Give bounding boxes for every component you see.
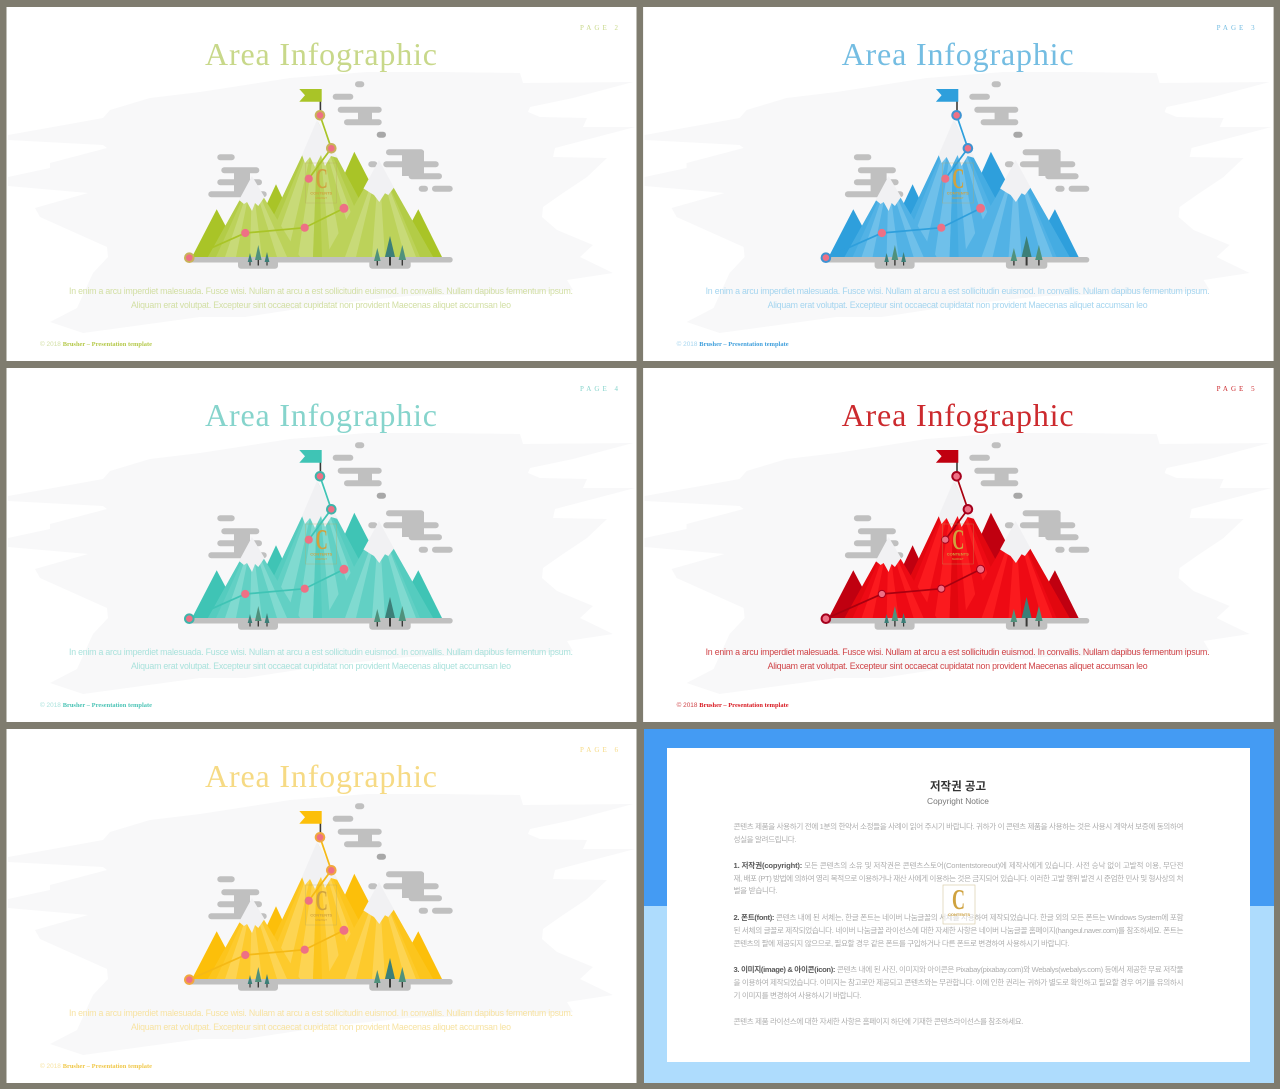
copyright heading: 저작권 공고: [930, 779, 986, 793]
copyright subheading: Copyright Notice: [927, 796, 989, 806]
body text: In enim a arcu imperdiet malesuada. Fusce wisi. Nullam at arcu a est sollicitudin euismod. In convallis. Nullam dapibus fermentum ipsum.: [69, 1008, 573, 1018]
section 1: copyright: 1. 저작권(copyright): 모든 콘텐츠의 소유 및 저작권은 콘텐츠스토어(Contentstoreout)에 제작사에게 있습니다. 사전 승낙 없이 고발적 이용, 무단전: [734, 860, 1184, 870]
closing note: 콘텐츠 제품 라이선스에 대한 자세한 사항은 홈페이지 하단에 기재한 콘텐츠라이선스를 참조하세요.: [734, 1016, 1024, 1026]
body text: [69, 286, 573, 310]
watermark logo: [306, 885, 337, 925]
summit flag: [936, 450, 958, 472]
section 1: copyright: [734, 860, 1184, 895]
clouds: [845, 442, 1089, 558]
ground: [827, 618, 1089, 630]
ground: [827, 257, 1089, 269]
copyright intro: [734, 821, 1184, 844]
snow caps: [876, 120, 1031, 211]
summit flag: [936, 89, 958, 111]
body text: Aliquam erat volutpat. Excepteur sint occaecat cupidatat non provident Maecenas aliquet accumsan leo: [768, 661, 1148, 671]
body text: In enim a arcu imperdiet malesuada. Fusce wisi. Nullam at arcu a est sollicitudin euismod. In convallis. Nullam dapibus fermentum ipsum.: [69, 647, 573, 657]
mountains: [192, 844, 442, 979]
copyright intro: 콘텐츠 제품을 사용하기 전에 1분의 한약서 소정들을 사례이 읽어 주시기 바랍니다. 귀하가 이 콘텐츠 제품을 사용하는 것은 사용시 계약서 보증에 동의하여: [734, 821, 1184, 831]
body text: In enim a arcu imperdiet malesuada. Fusce wisi. Nullam at arcu a est sollicitudin euismod. In convallis. Nullam dapibus fermentum ipsum.: [706, 286, 1210, 296]
snow caps: [876, 481, 1031, 572]
route nodes: [822, 472, 985, 623]
section 2: font: 된 서체의 글꼴로 제작되었습니다. 네이버 나눔글꼴 라이선스에 대한 자세한 사항은 네이버 나눔글꼴 홈페이지(hangeul.naver.com)를 참조하세요. 폰트는: [734, 925, 1184, 935]
climbing route: [189, 837, 344, 980]
footer: © 2018 Brusher – Presentation template: [40, 1062, 152, 1070]
clouds: [208, 442, 453, 558]
summit flag: [299, 811, 322, 833]
snow caps: [239, 842, 394, 933]
body text: In enim a arcu imperdiet malesuada. Fusce wisi. Nullam at arcu a est sollicitudin euismod. In convallis. Nullam dapibus fermentum ipsum.: [706, 647, 1210, 657]
ground: [190, 618, 453, 630]
ground: [190, 257, 453, 269]
footer: © 2018 Brusher – Presentation template: [677, 701, 789, 709]
section 3: image and icon: 기 이미지를 변경하여 사용하시기 바랍니다.: [734, 990, 862, 1000]
title: Area Infographic: [205, 36, 437, 72]
route nodes: [822, 111, 985, 262]
body text: In enim a arcu imperdiet malesuada. Fusce wisi. Nullam at arcu a est sollicitudin euismod. In convallis. Nullam dapibus fermentum ipsum.: [69, 286, 573, 296]
section 3: image and icon: [734, 964, 1184, 1000]
title: Area Infographic: [842, 397, 1074, 433]
clouds: [208, 81, 453, 197]
climbing route: [189, 115, 344, 258]
body text: Aliquam erat volutpat. Excepteur sint occaecat cupidatat non provident Maecenas aliquet accumsan leo: [131, 661, 511, 671]
route nodes: [185, 472, 348, 623]
body text: Aliquam erat volutpat. Excepteur sint occaecat cupidatat non provident Maecenas aliquet accumsan leo: [131, 1022, 511, 1032]
body text: Aliquam erat volutpat. Excepteur sint occaecat cupidatat non provident Maecenas aliquet accumsan leo: [131, 300, 511, 310]
section 1: copyright: 재, 배포 (PT) 방법에 의하여 영리 목적으로 이용하거나 재산 사에게 이용하는 것은 금지되어 있습니다. 이러한 고발 행위 발견 시 준엄한 민사 및 형사상의 처: [734, 873, 1184, 883]
snow caps: [239, 120, 394, 211]
trees: [884, 597, 1043, 626]
section 2: font: [734, 912, 1184, 948]
page number: PAGE 3: [1217, 24, 1255, 32]
route nodes: [185, 111, 348, 262]
mountains: [829, 483, 1079, 618]
panel: green slide, page 2: [6, 7, 636, 361]
title: Area Infographic: [205, 397, 437, 433]
ground: [190, 979, 453, 991]
panel: teal slide, page 4: [6, 368, 636, 722]
watermark logo: CONTENTS: [948, 912, 970, 917]
clouds: [845, 81, 1089, 197]
body text: [69, 1008, 573, 1032]
section 2: font: 2. 폰트(font): 콘텐츠 내에 된 서체는, 한글 폰트는 네이버 나눔글꼴의 서체를 사용하여 제작되었습니다. 한글 외의 모든 폰트는 Windows System에 포함: [734, 912, 1184, 922]
title: Area Infographic: [205, 758, 437, 794]
panel: blue slide, page 3: [643, 7, 1274, 361]
mountains: [192, 122, 442, 257]
section 2: font: 콘텐츠의 팔에 제공되지 않으므로, 필요할 경우 같은 폰트를 구입하거나 다른 폰트로 변경하여 사용하시기 바랍니다.: [734, 938, 1070, 948]
body text: [706, 647, 1210, 671]
climbing route: [189, 476, 344, 619]
trees: [248, 236, 406, 266]
snow caps: [239, 481, 394, 572]
route nodes: [185, 833, 348, 984]
climbing route: [826, 476, 981, 619]
page number: PAGE 5: [1217, 385, 1255, 393]
section 3: image and icon: 3. 이미지(image) & 아이콘(icon): 콘텐츠 내에 된 사진, 이미지와 아이콘은 Pixabay(pixabay.com)와 Webalys(webalys.com) 등에서 제공한 무료 저작물: [734, 964, 1184, 974]
footer: © 2018 Brusher – Presentation template: [40, 340, 152, 348]
section 1: copyright: 벌을 받습니다.: [734, 885, 778, 895]
copyright intro: 성실을 알려드립니다.: [734, 834, 796, 844]
section 3: image and icon: 을 이용하여 제작되었습니다. 이미지는 참고로만 제공되고 콘텐츠와는 무관합니다. 이에 인한 권리는 귀하가 별도로 확인하고 필요할 경우 여기를 유의하시: [734, 977, 1184, 987]
watermark logo: [306, 524, 337, 564]
watermark logo: [942, 524, 973, 564]
watermark logo: [942, 163, 973, 203]
trees: [884, 236, 1043, 266]
title: Area Infographic: [842, 36, 1074, 72]
page number: PAGE 6: [580, 746, 618, 754]
panel: red slide, page 5: [643, 368, 1274, 722]
trees: [248, 597, 406, 626]
climbing route: [826, 115, 981, 258]
summit flag: [299, 89, 322, 111]
body text: Aliquam erat volutpat. Excepteur sint occaecat cupidatat non provident Maecenas aliquet accumsan leo: [768, 300, 1148, 310]
footer: © 2018 Brusher – Presentation template: [40, 701, 152, 709]
watermark logo: [306, 163, 337, 203]
watermark logo: [943, 885, 975, 924]
page number: PAGE 4: [580, 385, 618, 393]
mountains: [192, 483, 442, 618]
body text: [69, 647, 573, 671]
panel: copyright notice: [644, 729, 1274, 1083]
watermark logo: C: [952, 885, 965, 916]
panel: yellow slide, page 6: [6, 729, 636, 1083]
trees: [248, 958, 406, 988]
clouds: [208, 803, 453, 919]
mountains: [829, 122, 1079, 257]
body text: [706, 286, 1210, 310]
summit flag: [299, 450, 322, 472]
footer: © 2018 Brusher – Presentation template: [677, 340, 789, 348]
page number: PAGE 2: [580, 24, 618, 32]
